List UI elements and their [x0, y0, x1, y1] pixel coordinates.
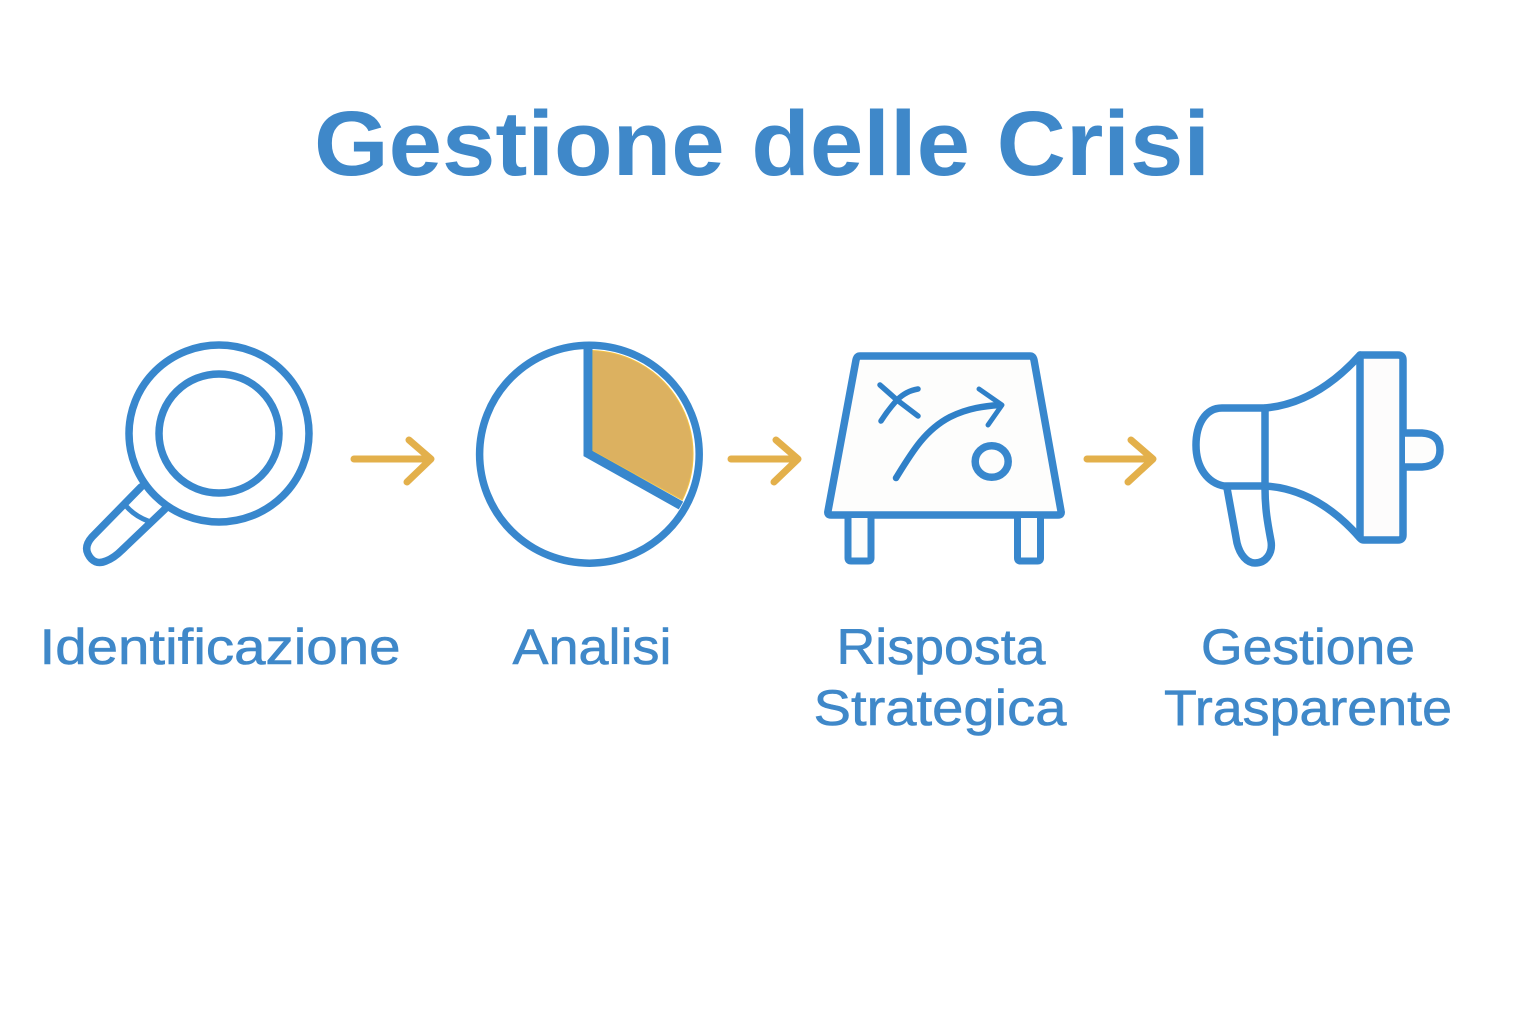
label: Identificazione: Identificazione — [40, 619, 400, 675]
icon: strategy board — [828, 356, 1061, 561]
label: Gestione Trasparente: Gestione — [1201, 619, 1415, 675]
icon: megaphone — [1196, 355, 1440, 563]
label: Gestione Trasparente — [1164, 619, 1452, 736]
arrow 1 — [354, 440, 431, 482]
icon: magnifying glass — [87, 345, 309, 562]
label: Gestione Trasparente: Trasparente — [1164, 680, 1452, 736]
icon: pie chart — [480, 345, 699, 563]
title: Gestione delle Crisi — [314, 93, 1210, 195]
arrow 3 — [1087, 440, 1153, 482]
label: Risposta Strategica: Risposta — [836, 619, 1046, 675]
label: Risposta Strategica: Strategica — [814, 680, 1067, 736]
label: Analisi: Analisi — [512, 619, 672, 675]
label: Risposta Strategica — [814, 619, 1067, 736]
arrow 2 — [731, 440, 798, 482]
